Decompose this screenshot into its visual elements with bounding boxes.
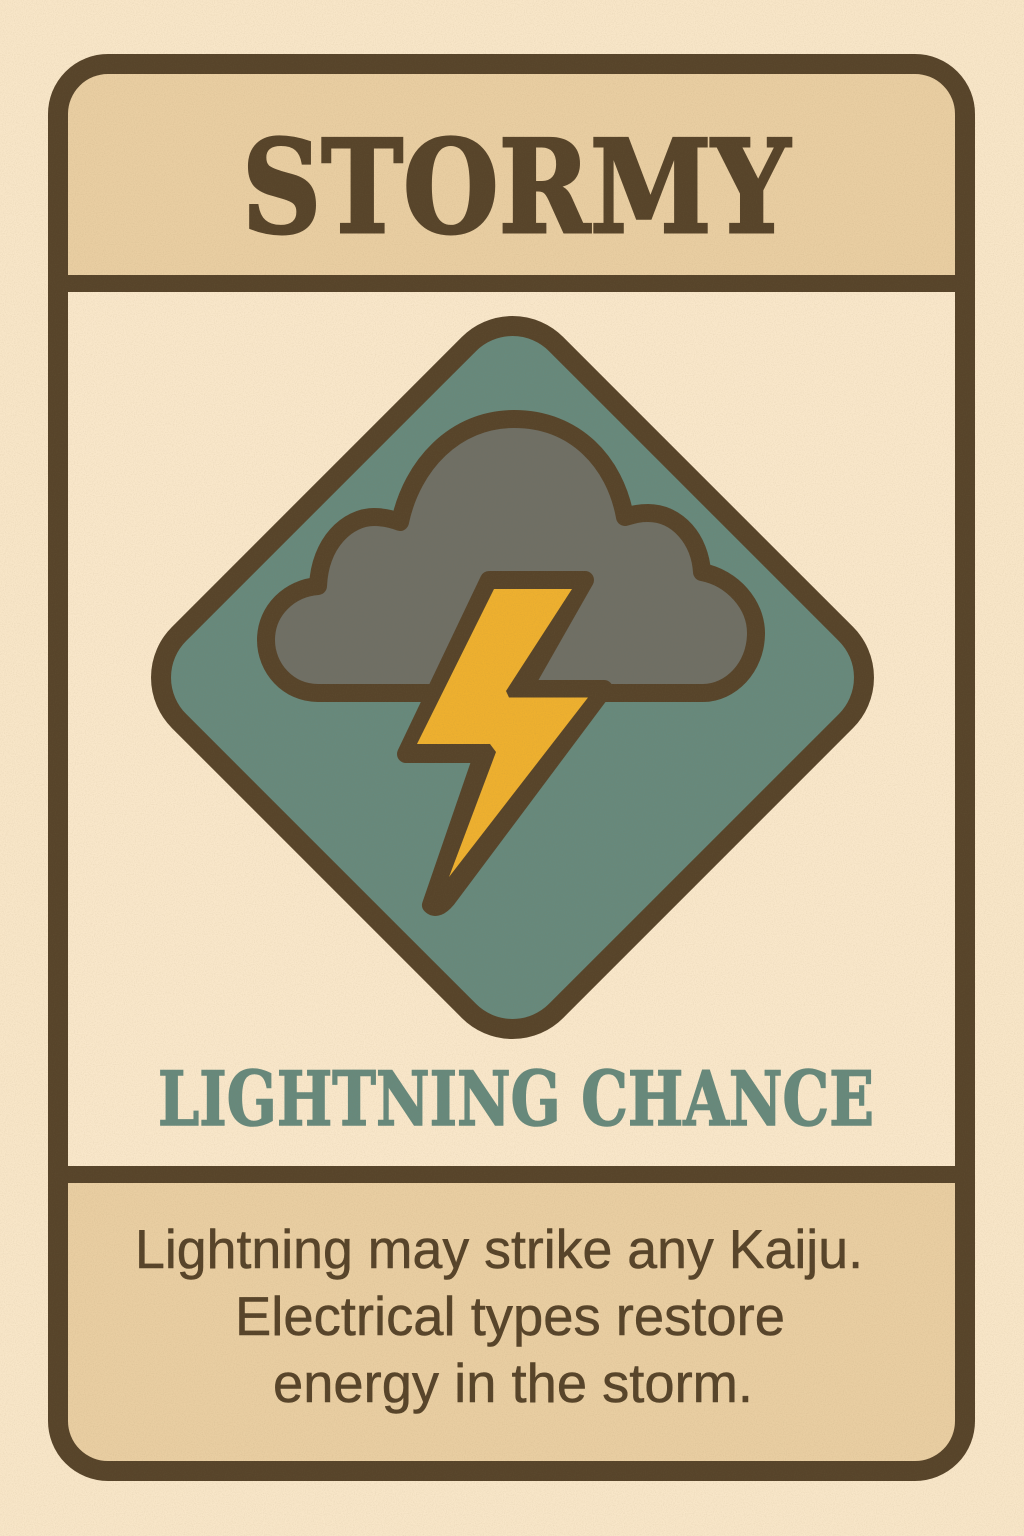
description text: Electrical types restore <box>235 1285 785 1347</box>
footer divider <box>58 1166 965 1183</box>
footer band background <box>58 1174 965 1471</box>
diamond sign <box>161 326 864 1029</box>
header divider <box>58 275 965 292</box>
description text: energy in the storm. <box>273 1352 753 1414</box>
header band background <box>68 74 955 275</box>
description text <box>135 1218 863 1414</box>
icon: lightning bolt <box>406 580 604 907</box>
title: STORMY <box>242 113 791 263</box>
description text: Lightning may strike any Kaiju. <box>135 1218 863 1280</box>
bolt outline <box>406 580 604 907</box>
icon: storm cloud <box>266 419 756 693</box>
icon: diamond weather badge <box>161 326 864 1029</box>
bolt fill <box>417 589 588 877</box>
